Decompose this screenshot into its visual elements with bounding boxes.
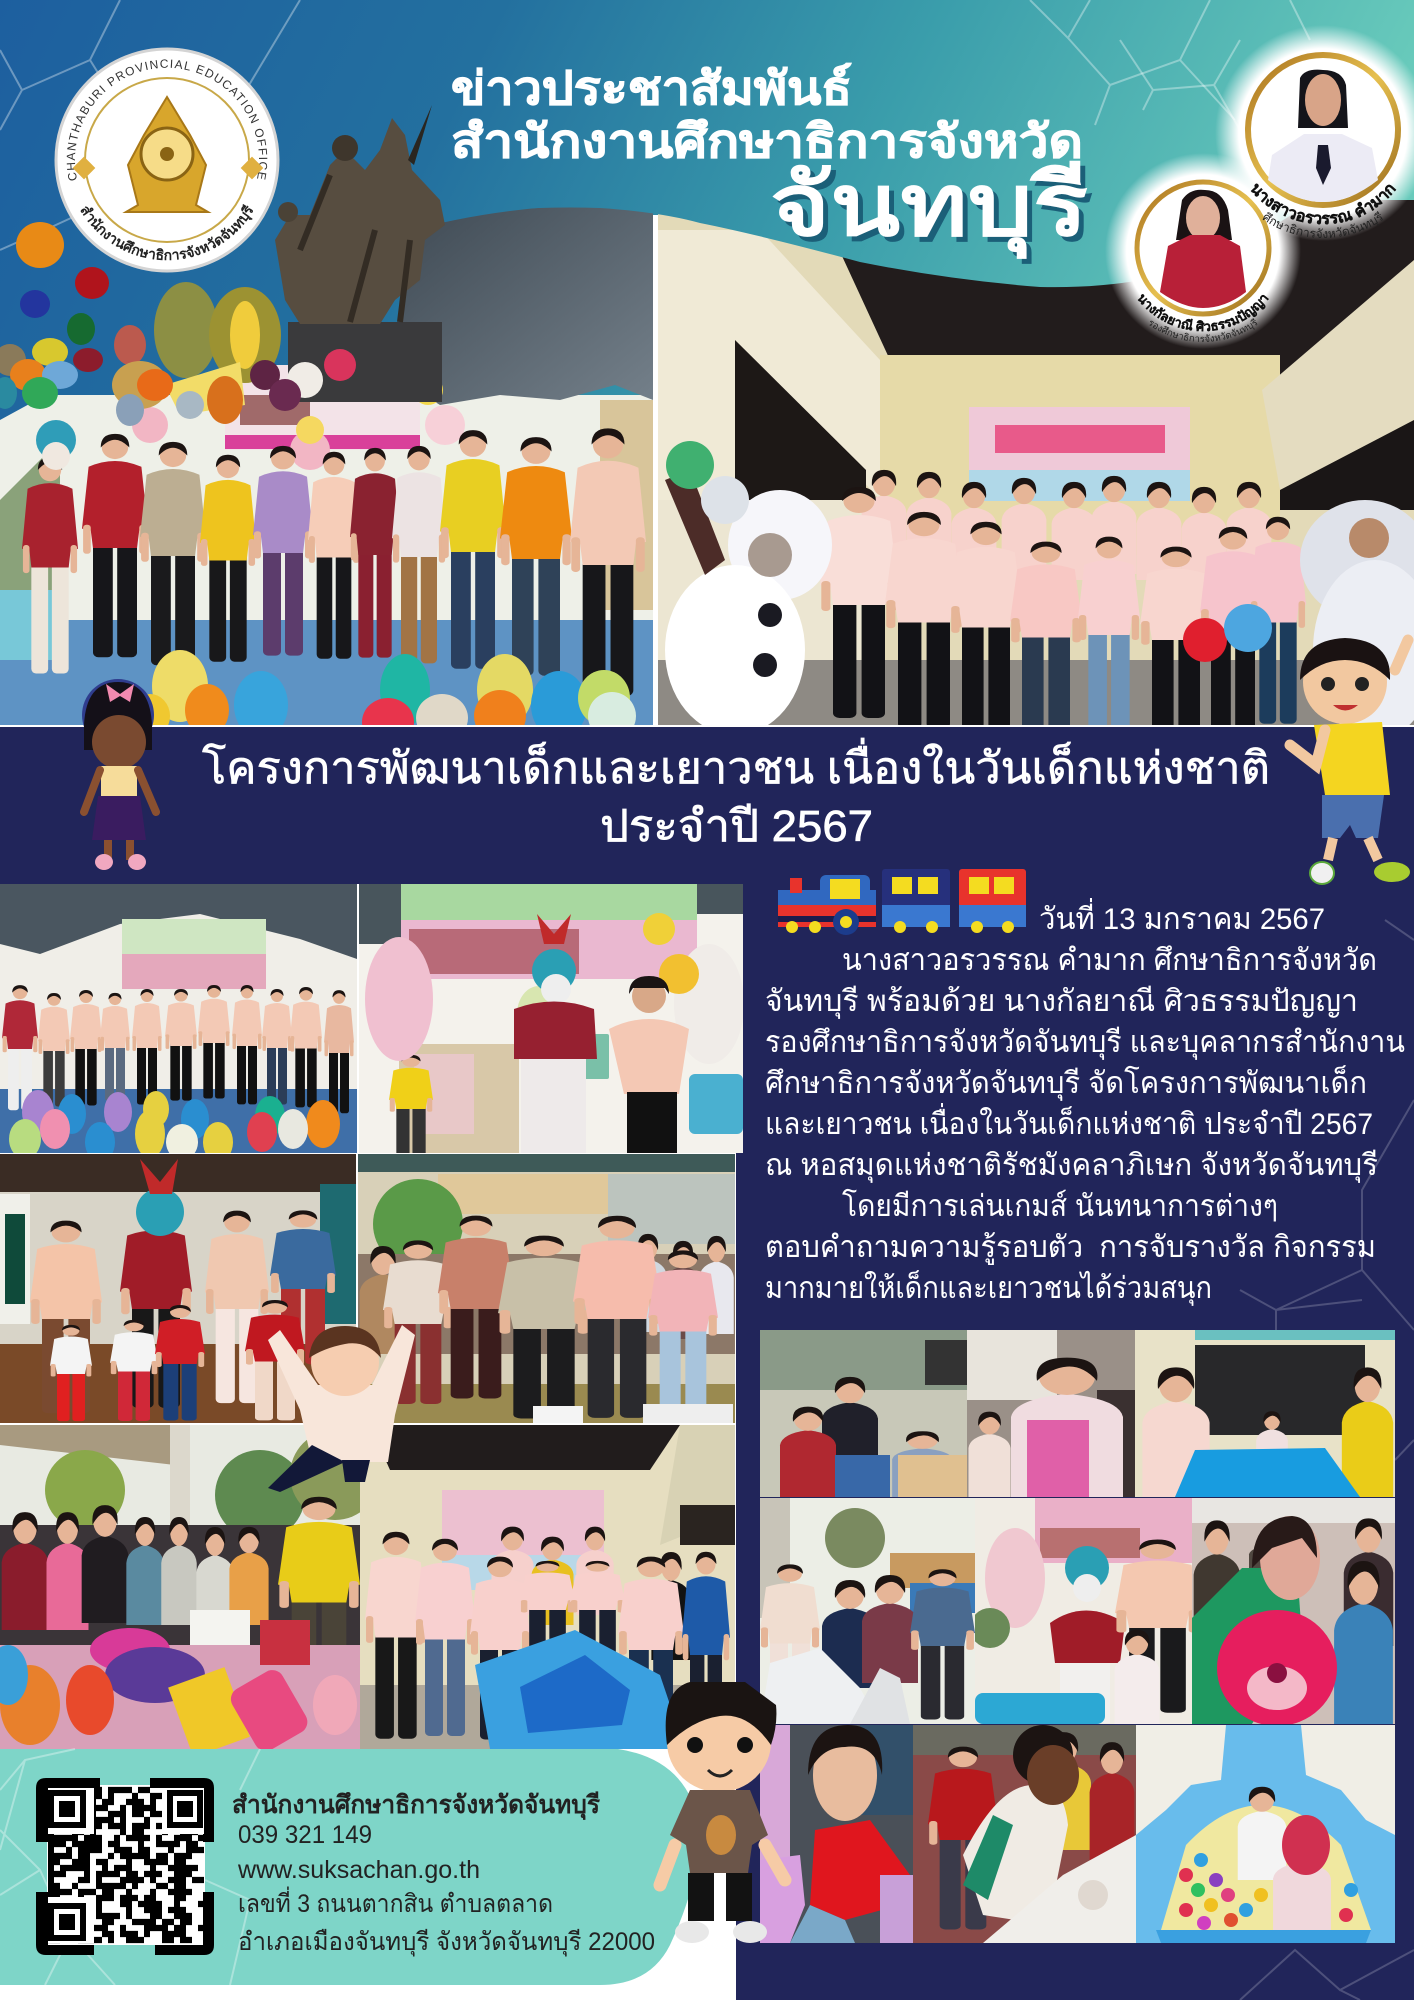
collage photo: seated guests outdoors xyxy=(358,1154,735,1423)
right collage row 2 xyxy=(760,1498,1395,1726)
photo: children crafting xyxy=(913,1725,1136,1943)
title: press release header: จันทบุรี xyxy=(770,158,1088,259)
footer panel: www.suksachan.go.th xyxy=(237,1856,480,1884)
portrait: deputy education officer: นางกัลยาณี ศิวธรรมปัญญา xyxy=(1138,294,1269,332)
fruit and gemstones decoration xyxy=(0,222,356,426)
footer panel: เลขที่ 3 ถนนตากสิน ตำบลตลาด xyxy=(238,1886,553,1918)
title: press release header xyxy=(451,62,1093,264)
collage photo: group on stage xyxy=(0,884,357,1153)
photo: inflatable ball pit xyxy=(1136,1725,1395,1943)
news article text: มากมายให้เด็กและเยาวชนได้ร่วมสนุก xyxy=(765,1269,1212,1307)
snowman costume xyxy=(665,470,832,735)
logo: Chanthaburi Provincial Education Office xyxy=(54,48,280,272)
balloons xyxy=(130,650,636,746)
news article text: ศึกษาธิการจังหวัดจันทบุรี จัดโครงการพัฒนาเด็ก xyxy=(765,1064,1367,1102)
news article text: จันทบุรี พร้อมด้วย นางกัลยาณี ศิวธรรมปัญญา xyxy=(765,985,1358,1020)
character: boy in brown shirt xyxy=(660,1682,785,1943)
news article text: ตอบคำถามความรู้รอบตัว การจับรางวัล กิจกรรม xyxy=(765,1231,1376,1265)
news article text: นางสาวอรวรรณ คำมาก ศึกษาธิการจังหวัด xyxy=(842,944,1377,977)
portrait: deputy education officer xyxy=(1134,180,1272,342)
photo: woman with blue pool xyxy=(1135,1330,1395,1497)
footer panel: 039 321 149 xyxy=(238,1821,372,1849)
photo: woman with pink bear xyxy=(1192,1498,1395,1724)
right collage row 3 xyxy=(760,1725,1395,1943)
news article text: วันที่ 13 มกราคม 2567 xyxy=(1039,898,1325,936)
news article text: โดยมีการเล่นเกมส์ นันทนาการต่างๆ xyxy=(842,1188,1278,1223)
character: girl xyxy=(82,679,156,870)
gap between top photos xyxy=(653,215,658,727)
elephant costume xyxy=(1300,500,1414,740)
title: press release header: จันทบุรี xyxy=(775,163,1093,264)
character: boy in yellow shirt xyxy=(1290,638,1410,884)
title: press release header: สำนักงานศึกษาธิการจังหวัด xyxy=(451,115,1083,167)
QR code xyxy=(36,1778,214,1955)
logo: Chanthaburi Provincial Education Office: สำนักงานศึกษาธิการจังหวัดจันทบุรี xyxy=(80,204,253,260)
logo: Chanthaburi Provincial Education Office: CHANTHABURI PROVINCIAL EDUCATION OFFICE xyxy=(66,59,268,180)
news article text: ณ หอสมุดแห่งชาติรัชมังคลาภิเษก จังหวัดจันทบุรี xyxy=(765,1149,1378,1184)
collage photo: clown and children indoors xyxy=(0,1154,356,1423)
band: project title: ประจำปี 2567 xyxy=(600,802,873,851)
page background: navy right column xyxy=(736,727,1414,2000)
portrait: provincial education officer: ศึกษาธิการจังหวัดจันทบุรี xyxy=(1262,211,1382,238)
photo: food stall xyxy=(760,1330,967,1497)
header wave xyxy=(0,0,1414,420)
title: press release header: ข่าวประชาสัมพันธ์ xyxy=(451,62,852,114)
hex lines on navy column xyxy=(1240,920,1414,2000)
crowd xyxy=(820,470,1306,729)
photo: volunteers with bags xyxy=(760,1498,975,1724)
footer panel: สำนักงานศึกษาธิการจังหวัดจันทบุรี xyxy=(232,1791,601,1821)
collage photo: crowd with toy prizes xyxy=(0,1425,360,1749)
news article text: และเยาวชน เนื่องในวันเด็กแห่งชาติ ประจำปี 2567 xyxy=(765,1103,1373,1141)
white glow behind portraits xyxy=(1105,25,1414,349)
collage photo: staff with inflatable pool xyxy=(360,1425,735,1749)
band: project title: โครงการพัฒนาเด็กและเยาวชน เนื่องในวันเด็กแห่งชาติ xyxy=(202,737,1270,793)
icon: toy train xyxy=(778,869,1026,935)
photo: staff group in front of building xyxy=(658,200,1414,725)
photo: girl in red xyxy=(760,1725,913,1943)
footer panel xyxy=(0,1749,700,1985)
portrait: provincial education officer: นางสาวอรวรรณ คำมาก xyxy=(1250,184,1396,224)
right collage row 1 xyxy=(760,1330,1395,1497)
hexagon pattern on header xyxy=(0,0,1310,250)
photo: clown with child xyxy=(975,1498,1192,1724)
band: project title xyxy=(0,725,1414,884)
portrait: deputy education officer: รองศึกษาธิการจังหวัดจันทบุรี xyxy=(1150,318,1258,342)
footer panel: อำเภอเมืองจันทบุรี จังหวัดจันทบุรี 22000 xyxy=(238,1928,655,1957)
photo: woman with sash xyxy=(967,1330,1135,1497)
statue of King Taksin xyxy=(275,105,445,402)
sticker: girl waving xyxy=(268,1325,415,1492)
photo: dignitaries group at Chanthaburi xyxy=(0,208,653,725)
header background xyxy=(0,0,1414,420)
news article text xyxy=(765,898,1405,1307)
portrait: provincial education officer xyxy=(1245,52,1401,238)
collage photo: clown handing gift xyxy=(359,884,743,1153)
